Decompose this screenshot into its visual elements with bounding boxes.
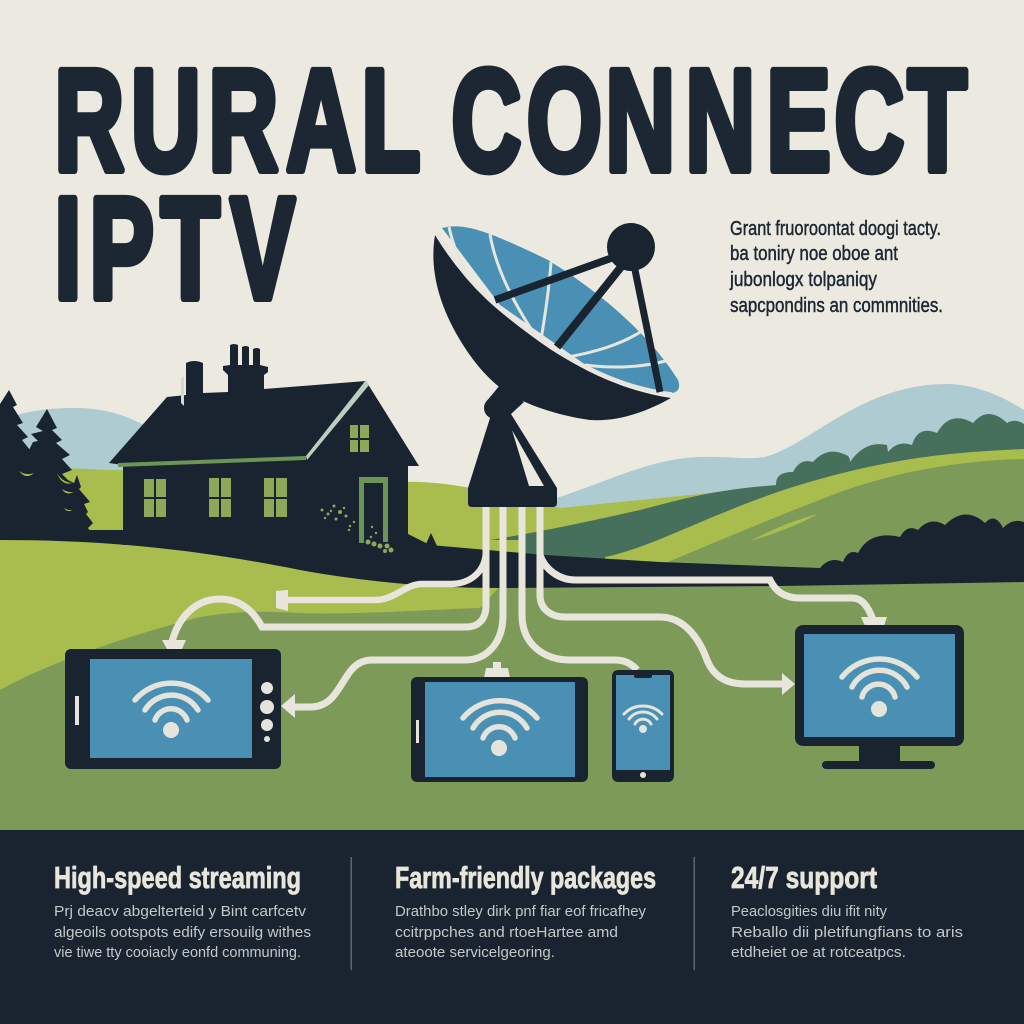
icon: pine trees (0, 390, 93, 540)
house (109, 344, 445, 553)
house silhouette (109, 344, 419, 545)
cable to centre tablet and phone (522, 507, 637, 670)
device: tablet (411, 677, 588, 782)
satellite dish (433, 223, 679, 507)
door (359, 477, 388, 543)
cable to landscape tablet (172, 507, 486, 642)
device: landscape tablet (65, 649, 281, 769)
feature: farm-friendly packages: Drathbo stley dirk pnf fiar eof fricafhey (395, 904, 647, 920)
device: monitor (795, 625, 964, 769)
intro text block: jubonlogx tolpaniqy (729, 269, 877, 291)
icon: wifi (135, 683, 208, 738)
intro text block: Grant fruoroontat doogi tacty. (730, 218, 941, 240)
title: RURAL CONNECT (54, 40, 967, 201)
intro text block: ba toniry noe oboe ant (730, 243, 898, 265)
feature: farm-friendly packages: ccitrppches and rtoeHartee amd (395, 925, 618, 941)
feature: farm-friendly packages: ateoote servicelgeoring. (395, 945, 555, 961)
feature: high-speed streaming: Prj deacv abgelterteid y Bint carfcetv (54, 904, 307, 920)
signal cables (172, 507, 873, 707)
feature: high-speed streaming: High-speed streaming (54, 860, 301, 895)
title (54, 40, 967, 329)
reflector ribs (449, 227, 669, 367)
feature: 24/7 support: Reballo dii pletifungfians to aris (731, 925, 963, 941)
feature: 24/7 support: etdheiet oe at rotceatpcs. (731, 945, 906, 961)
arrowheads (162, 590, 887, 718)
feature: farm-friendly packages (395, 860, 656, 961)
icon: wifi (842, 659, 917, 717)
feature: 24/7 support: 24/7 support (731, 860, 877, 895)
feature: farm-friendly packages: Farm-friendly packages (395, 860, 656, 895)
landscape background (0, 384, 1024, 835)
intro text block: sapcpondins an commnities. (730, 295, 943, 317)
icon: wifi (624, 706, 662, 733)
icon: wifi (463, 701, 537, 756)
mount base (468, 385, 557, 507)
dish bowl (433, 235, 671, 420)
dish reflector (442, 226, 679, 394)
shrubs (320, 504, 394, 553)
feature: high-speed streaming: vie tiwe tty cooiacly eonfd communing. (54, 945, 301, 961)
intro text block (729, 218, 943, 317)
windows (144, 425, 369, 517)
dark ground band and bushes (0, 514, 1024, 588)
footer panel (0, 830, 1024, 1024)
feature: high-speed streaming: algeoils ootspots edify ersouilg withes (54, 925, 311, 941)
feed arms and head (495, 223, 660, 392)
cable to left arrow (292, 507, 503, 707)
feature: high-speed streaming (54, 860, 311, 961)
feature: 24/7 support (731, 860, 963, 961)
device: phone (612, 670, 674, 782)
title: IPTV (54, 168, 295, 329)
cable to plug (285, 507, 486, 600)
cable to monitor top (540, 555, 873, 620)
cable to monitor right side (540, 507, 785, 684)
feature: 24/7 support: Peaclosgities diu ifit nity (731, 904, 888, 920)
